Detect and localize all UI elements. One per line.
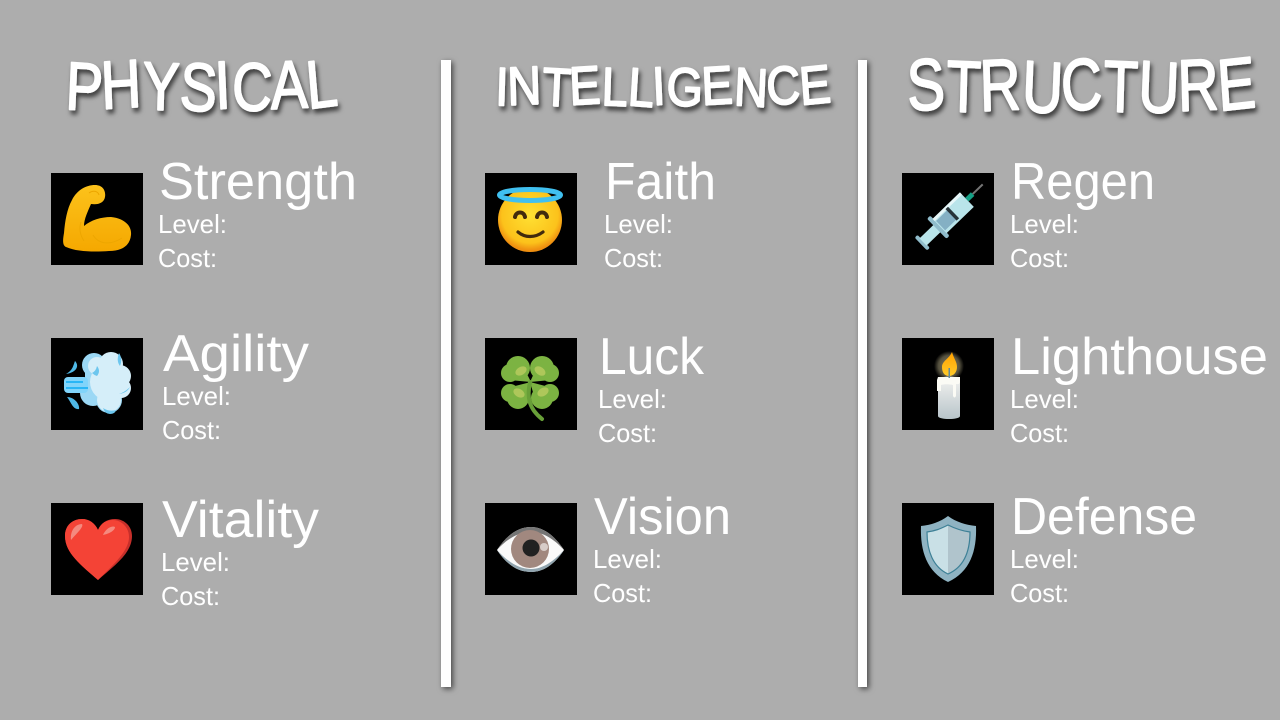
stat: defense — [902, 488, 1197, 608]
label: luck: Luck — [599, 328, 705, 386]
label: level: Level: — [1010, 384, 1079, 414]
stat: luck — [485, 328, 705, 448]
icon: smiling face with halo — [485, 173, 577, 265]
label: level: Level: — [598, 384, 667, 414]
divider: right — [858, 60, 867, 687]
panel: physical — [51, 153, 357, 611]
stat: regen — [902, 153, 1155, 273]
label: cost: Cost: — [598, 418, 657, 448]
label: level: Level: — [161, 547, 230, 577]
panel: structure — [902, 153, 1268, 608]
label: cost: Cost: — [1010, 578, 1069, 608]
label: level: Level: — [1010, 209, 1079, 239]
icon: red heart — [51, 503, 143, 595]
label: level: Level: — [1010, 544, 1079, 574]
label: level: Level: — [162, 381, 231, 411]
panel: intelligence — [485, 153, 731, 608]
icon: dash cloud — [51, 338, 143, 430]
stat: vitality — [51, 491, 319, 611]
heading: Physical: PHYSICAL — [64, 45, 340, 127]
label: defense: Defense — [1011, 488, 1197, 546]
heading: Intelligence: INTELLIGENCE — [495, 54, 833, 119]
label: lighthouse: Lighthouse — [1011, 328, 1268, 386]
label: cost: Cost: — [593, 578, 652, 608]
label: level: Level: — [593, 544, 662, 574]
stat: lighthouse — [902, 328, 1268, 448]
stat: agility — [51, 325, 309, 445]
label: vitality: Vitality — [162, 491, 319, 549]
heading: Structure: STRUCTURE — [905, 43, 1258, 129]
label: regen: Regen — [1011, 153, 1155, 211]
label: cost: Cost: — [158, 243, 217, 273]
label: level: Level: — [158, 209, 227, 239]
icon: flexed biceps — [51, 173, 143, 265]
label: cost: Cost: — [1010, 243, 1069, 273]
label: faith: Faith — [605, 153, 716, 211]
label: cost: Cost: — [161, 581, 220, 611]
label: vision: Vision — [594, 488, 731, 546]
icon: candle — [902, 338, 994, 430]
label: cost: Cost: — [1010, 418, 1069, 448]
icon: shield — [902, 503, 994, 595]
label: level: Level: — [604, 209, 673, 239]
icon: syringe — [902, 173, 994, 265]
label: strength: Strength — [159, 153, 357, 211]
label: agility: Agility — [163, 325, 309, 383]
stat: faith — [485, 153, 716, 273]
stat: vision — [485, 488, 731, 608]
stat: strength — [51, 153, 357, 273]
icon: eye — [485, 503, 577, 595]
divider: left — [441, 60, 451, 687]
label: cost: Cost: — [604, 243, 663, 273]
label: cost: Cost: — [162, 415, 221, 445]
icon: four leaf clover — [485, 338, 577, 430]
